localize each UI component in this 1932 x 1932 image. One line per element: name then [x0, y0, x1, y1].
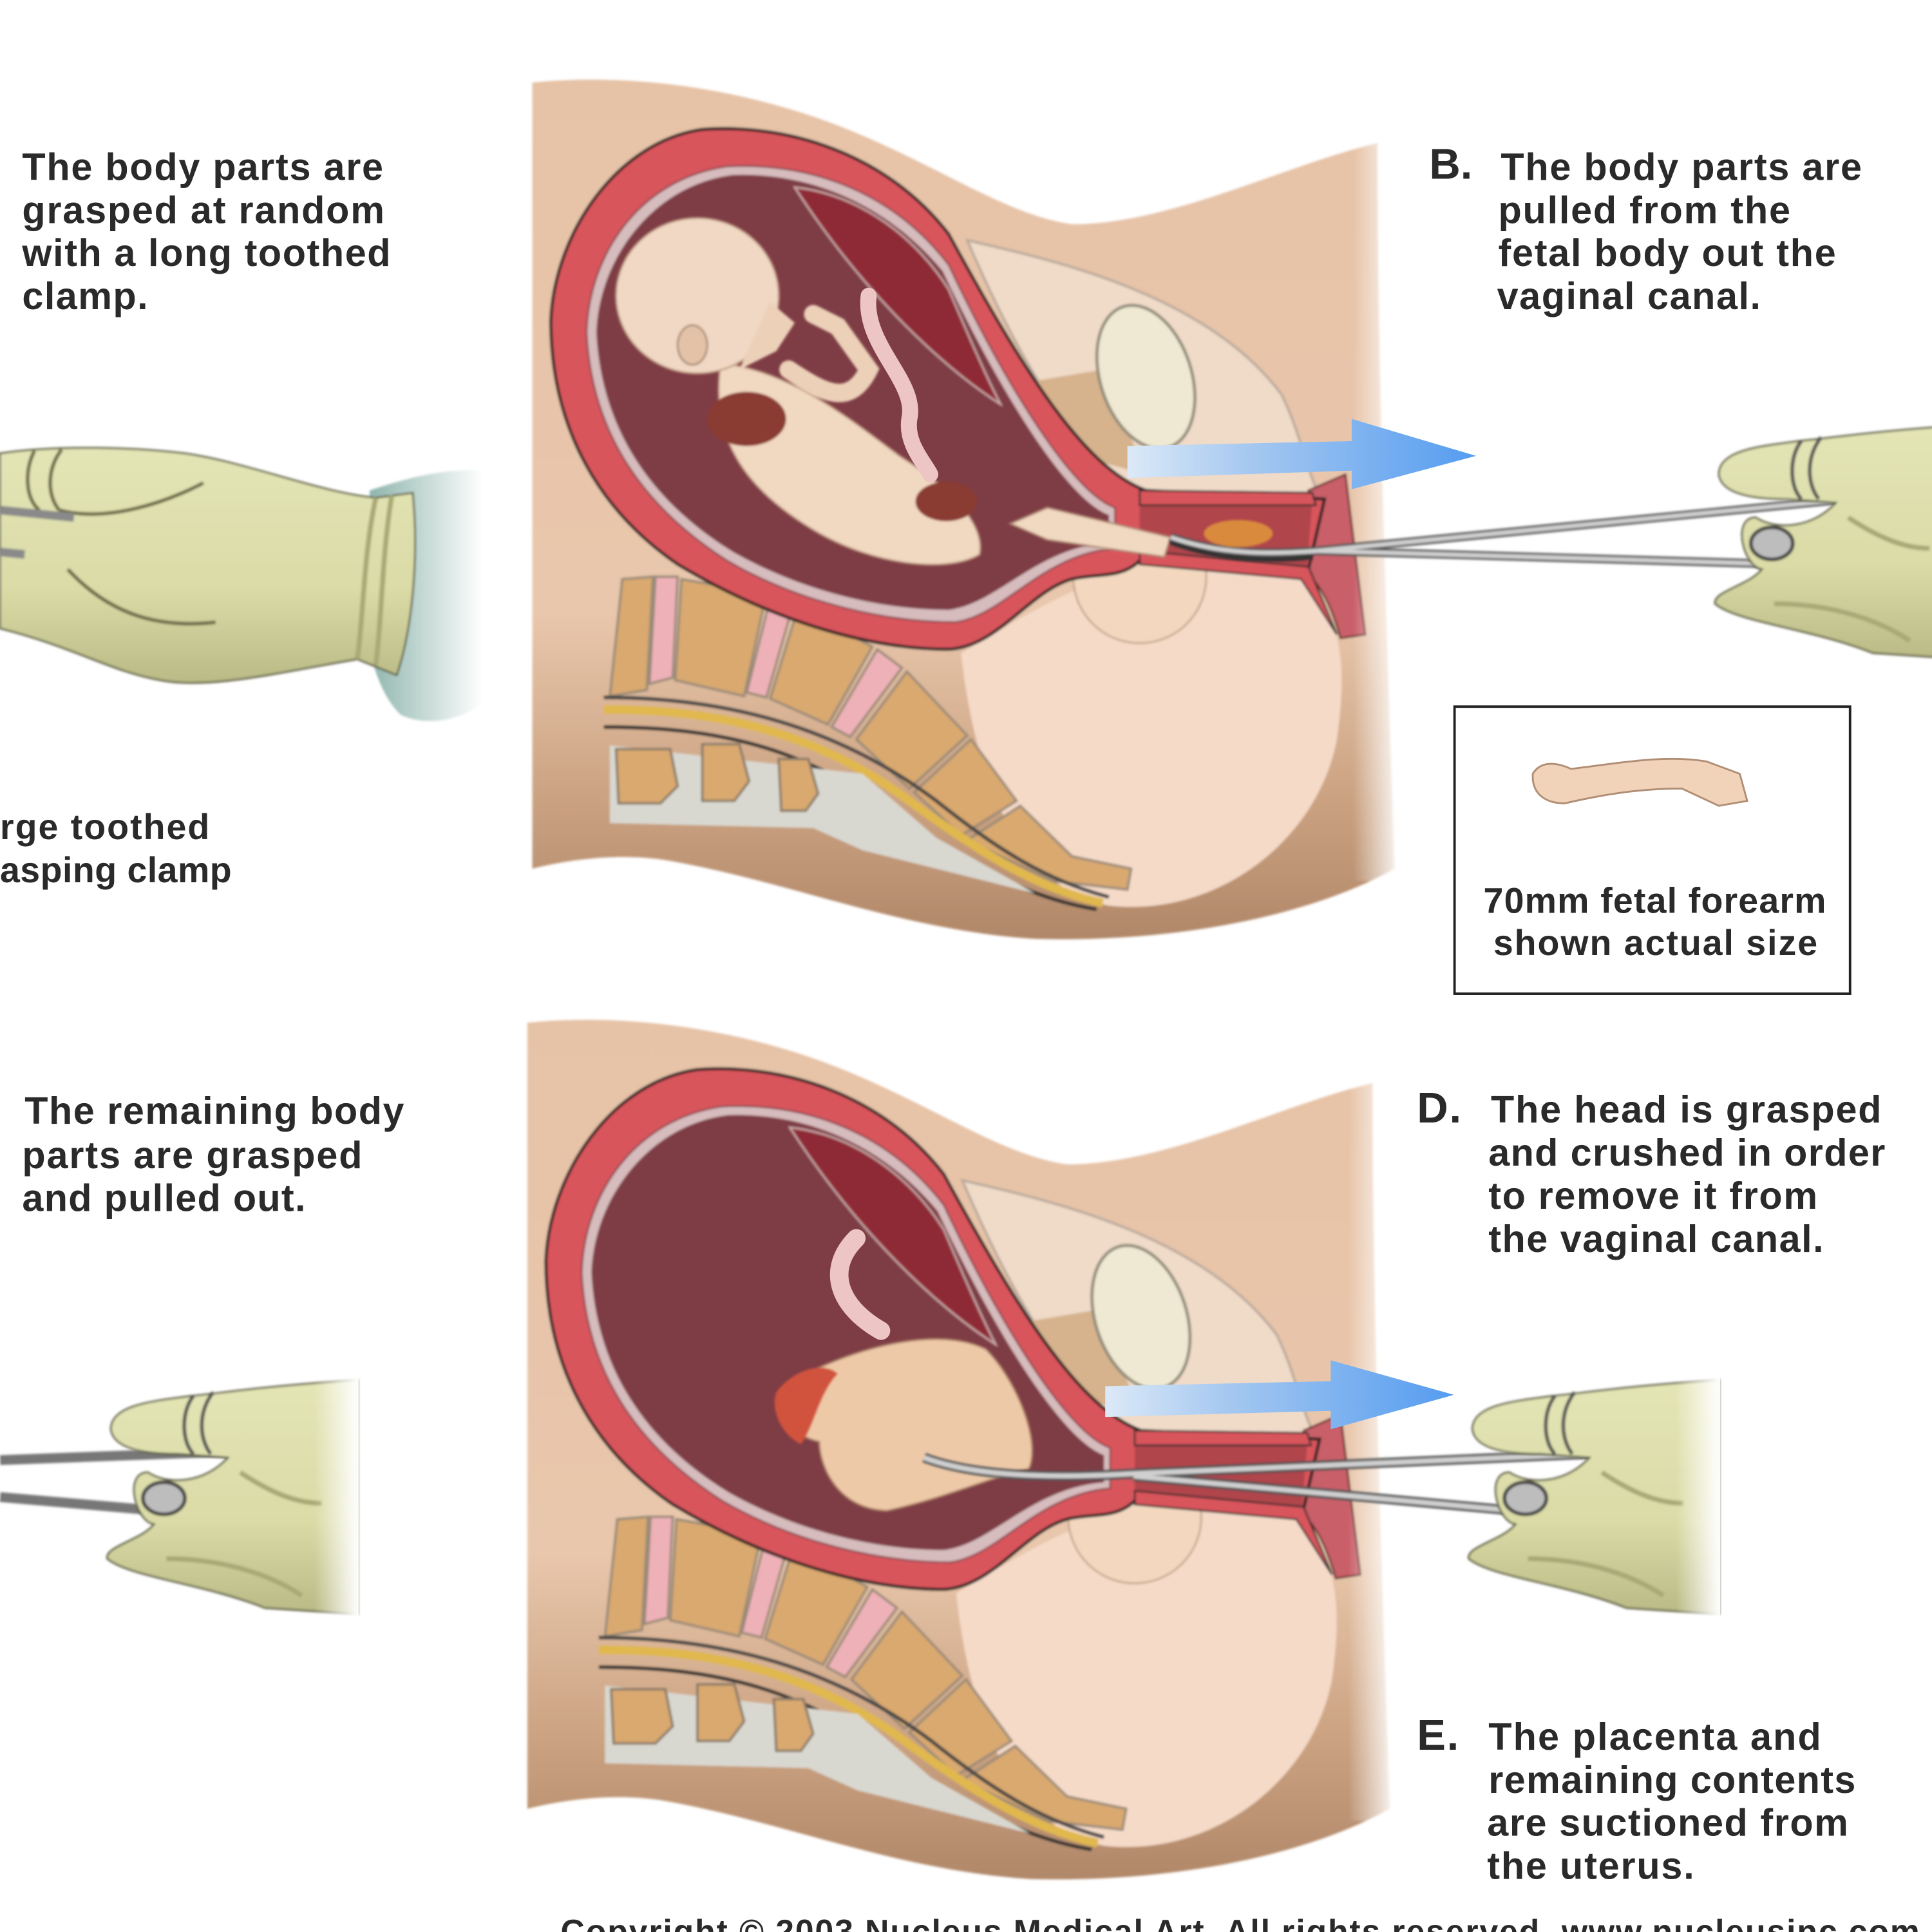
inset caption	[1484, 881, 1826, 963]
icon: right gloved hand, lower	[1468, 1368, 1720, 1627]
heading: step D text: The head is grasped	[1491, 1088, 1882, 1131]
heading: step E text: remaining contents	[1488, 1758, 1855, 1801]
icon: forearm	[1533, 759, 1747, 806]
heading: step E text: E.	[1417, 1711, 1459, 1759]
heading: step B text: pulled from the	[1499, 188, 1790, 231]
heading: step C text	[22, 1089, 404, 1220]
heading: step A text: clamp.	[22, 274, 148, 317]
heading: step B text: vaginal canal.	[1497, 274, 1761, 317]
heading: step D text: the vaginal canal.	[1488, 1217, 1824, 1260]
panel A: left hand holding clamp	[0, 448, 483, 721]
fetal head lower	[775, 1339, 1032, 1511]
umbilical cord lower	[839, 1238, 881, 1331]
label: large toothed grasping clamp: asping clamp	[0, 850, 232, 890]
heading: step E text	[1417, 1711, 1855, 1888]
forceps upper	[1171, 500, 1836, 564]
heading: step E text: the uterus.	[1487, 1844, 1694, 1888]
glove cuff detail	[357, 495, 392, 665]
heading: step D text: and crushed in order	[1488, 1131, 1885, 1174]
icon: right gloved hand, upper	[1715, 425, 1932, 659]
heading: step C text: parts are grasped	[22, 1133, 362, 1177]
heading: step D text: D.	[1417, 1084, 1461, 1132]
panel: lower anatomy cross-section	[527, 1019, 1397, 1879]
icon: sleeve	[370, 470, 483, 721]
heading: step A text: The body parts are	[22, 145, 383, 188]
heading: step C text: and pulled out.	[22, 1177, 305, 1220]
heading: step E text: The placenta and	[1488, 1715, 1821, 1758]
label: large toothed grasping clamp: rge toothed	[0, 807, 209, 847]
inset caption: shown actual size	[1493, 923, 1817, 963]
heading: step A text	[21, 145, 391, 317]
heading: step B text: The body parts are	[1501, 145, 1862, 188]
fetus upper	[616, 218, 1171, 565]
heading: step B text: B.	[1429, 140, 1472, 188]
icon: clamp handle	[0, 510, 74, 554]
heading: step D text	[1417, 1084, 1885, 1260]
heading: step B text: fetal body out the	[1499, 231, 1836, 274]
forceps lower	[924, 1454, 1589, 1513]
heading: step A text: grasped at random	[22, 188, 384, 231]
heading: step B text	[1429, 140, 1862, 317]
heading: step A text: with a long toothed	[21, 231, 391, 274]
inset caption: 70mm fetal forearm	[1484, 881, 1826, 921]
icon: left forceps and gloved hand, lower	[0, 1368, 359, 1627]
heading: step E text: are suctioned from	[1487, 1801, 1848, 1844]
arrow: upper pull direction	[1128, 419, 1476, 489]
heading: step D text: to remove it from	[1488, 1174, 1817, 1217]
arrow: lower pull direction	[1105, 1360, 1454, 1429]
glove finger detail	[28, 450, 216, 623]
panel: upper anatomy cross-section	[533, 80, 1402, 939]
umbilical cord upper	[868, 296, 931, 475]
icon: gloved hand	[0, 448, 415, 683]
label: large toothed grasping clamp	[0, 807, 232, 890]
heading: step C text: The remaining body	[24, 1089, 404, 1132]
panel: actual size inset	[1455, 706, 1850, 994]
